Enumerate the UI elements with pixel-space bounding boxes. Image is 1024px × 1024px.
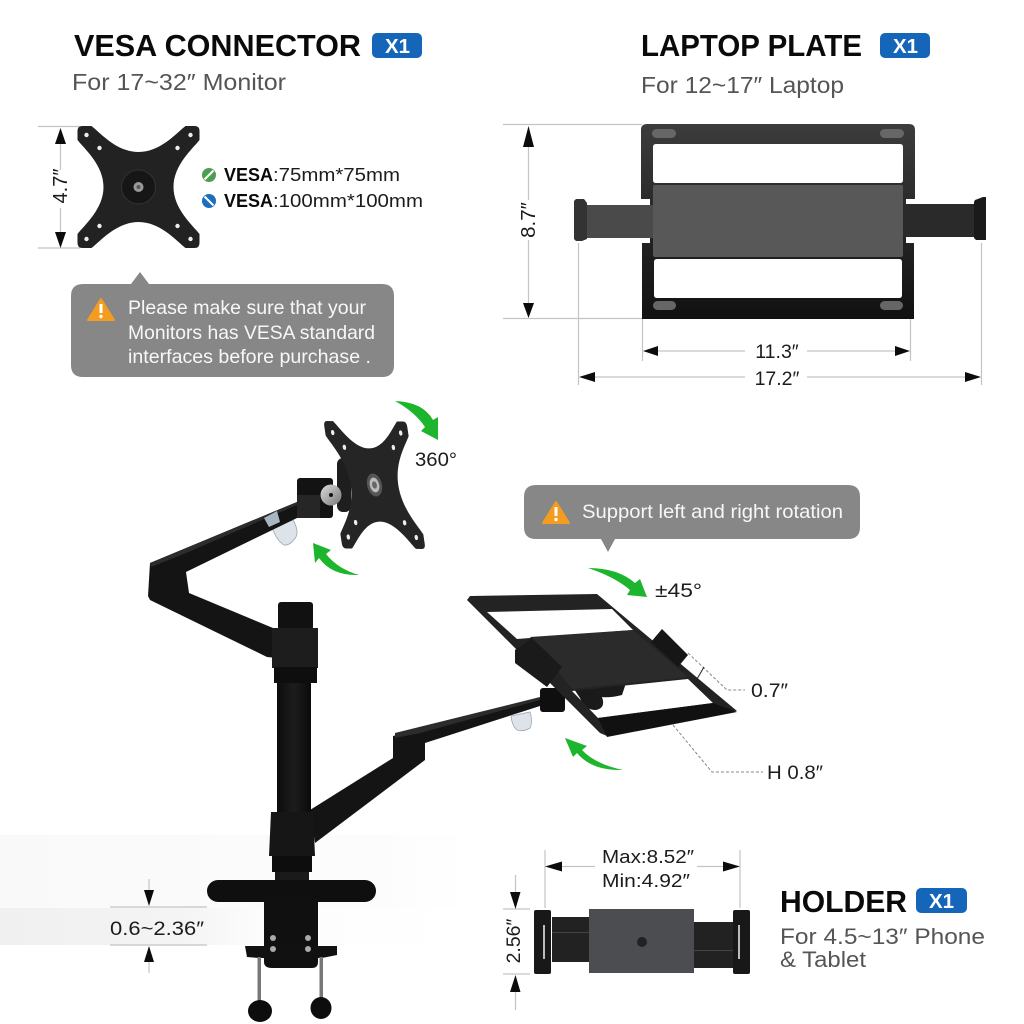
legend text: 100mm: VESA bbox=[224, 190, 273, 211]
monitor arm product bbox=[148, 421, 540, 1022]
laptop arm highlight bbox=[395, 697, 540, 738]
holder grips bbox=[534, 910, 750, 974]
icon: VESA plate bbox=[78, 126, 200, 248]
arm highlight bbox=[150, 502, 297, 567]
callout text: Please make sure that your bbox=[128, 297, 367, 319]
badge: X1 bbox=[880, 33, 930, 58]
laptop plate diagram bbox=[503, 124, 986, 390]
dimension: width: Max:8.52″ bbox=[602, 847, 695, 867]
legend text: 100mm: :100mm*100mm bbox=[273, 190, 423, 211]
tray hub bbox=[540, 680, 627, 712]
tray centre panel bbox=[530, 630, 688, 689]
dimension: 0.7 inch bbox=[688, 653, 788, 702]
holder dimensions bbox=[503, 847, 740, 1010]
heading: laptop plate: LAPTOP PLATE bbox=[641, 28, 862, 63]
badge: X1: X1 bbox=[929, 891, 954, 913]
legend text: 100mm bbox=[224, 190, 423, 211]
left arm and grip bbox=[574, 199, 654, 241]
dimension: desk thickness bbox=[110, 879, 207, 973]
dimension: 8.7 inch: 8.7″ bbox=[517, 202, 540, 238]
subtitle: monitor size: For 17~32″ Monitor bbox=[72, 69, 286, 95]
dimension: 17.2 inch: 17.2″ bbox=[755, 368, 800, 390]
centre panel bbox=[653, 185, 903, 257]
badge: X1: X1 bbox=[385, 36, 410, 58]
left grip bbox=[515, 638, 562, 687]
legend text: 75mm: VESA bbox=[224, 164, 273, 185]
legend text: 75mm: :75mm*75mm bbox=[273, 164, 400, 185]
badge: X1 bbox=[372, 33, 422, 58]
dimension: width: Min:4.92″ bbox=[602, 871, 691, 891]
label: 360 degrees: 360° bbox=[415, 449, 457, 471]
clip band bbox=[264, 511, 280, 527]
callout text: Support left and right rotation bbox=[582, 501, 843, 523]
clamp bracket bbox=[245, 898, 337, 1022]
plate body bbox=[641, 124, 915, 319]
dimension: width bbox=[602, 847, 695, 891]
icon: blue screw bbox=[202, 194, 216, 208]
heading: holder bbox=[780, 884, 985, 972]
icon: green screw bbox=[202, 168, 216, 182]
legend: VESA sizes bbox=[202, 164, 423, 211]
callout: VESA warning bbox=[71, 272, 394, 377]
icon: warning triangle bbox=[543, 502, 569, 523]
tray front lip bbox=[598, 703, 737, 737]
legend text: 75mm bbox=[224, 164, 400, 185]
subtitle: holder size: & Tablet bbox=[780, 947, 867, 972]
dimension lines bbox=[503, 124, 982, 390]
VESA plate diagram with height dimension bbox=[38, 126, 200, 248]
upper arm and elbow bbox=[148, 502, 318, 662]
laptop tray on arm bbox=[467, 594, 737, 737]
dimension: H 0.8 inch bbox=[673, 725, 823, 784]
dimension: height: 2.56″ bbox=[503, 918, 525, 963]
subtitle: holder size bbox=[780, 924, 985, 972]
icon: warning triangle bbox=[88, 299, 114, 320]
subtitle: laptop size: For 12~17″ Laptop bbox=[641, 72, 844, 98]
second lower arm bbox=[310, 698, 540, 843]
dimension: H 0.8 inch: H 0.8″ bbox=[767, 762, 823, 784]
right arm and grip bbox=[903, 197, 986, 240]
heading: laptop plate bbox=[641, 28, 930, 98]
dimension: 4.7 inch: 4.7″ bbox=[50, 169, 72, 203]
dimension: 0.7 inch: 0.7″ bbox=[751, 680, 788, 702]
callout: rotation note bbox=[524, 485, 860, 552]
rotation arrow: laptop bottom bbox=[565, 738, 623, 770]
heading: holder: HOLDER bbox=[780, 884, 907, 919]
dimension: desk thickness: 0.6~2.36″ bbox=[110, 918, 204, 940]
callout text: interfaces before purchase . bbox=[128, 346, 371, 368]
callout text: Monitors has VESA standard bbox=[128, 322, 375, 344]
badge: X1: X1 bbox=[893, 36, 918, 58]
rotation arrow: laptop top bbox=[588, 568, 647, 597]
holder arms bbox=[552, 917, 733, 968]
holder centre bbox=[589, 909, 694, 973]
heading: VESA connector: VESA CONNECTOR bbox=[74, 28, 361, 63]
heading: VESA connector bbox=[72, 28, 422, 95]
desk surface background bbox=[0, 835, 470, 945]
rubber pads bbox=[652, 129, 904, 310]
VESA plate on arm bbox=[324, 421, 425, 549]
badge: X1 bbox=[916, 888, 967, 913]
dimension: 11.3 inch: 11.3″ bbox=[755, 341, 799, 363]
clear clip on laptop arm bbox=[511, 712, 532, 731]
rotation arrow: 360 bottom bbox=[313, 543, 359, 575]
right grip bbox=[651, 629, 688, 667]
label: plus minus 45 degrees: ±45° bbox=[655, 580, 702, 602]
swivel head bbox=[297, 458, 351, 518]
dimension: 4.7 inch bbox=[38, 126, 80, 248]
clamp base bbox=[207, 880, 376, 902]
cable clip bbox=[272, 520, 297, 545]
subtitle: holder size: For 4.5~13″ Phone bbox=[780, 924, 985, 949]
tray frame bbox=[467, 594, 737, 736]
callout text bbox=[128, 297, 375, 368]
pole bbox=[269, 602, 318, 886]
rotation arrow: 360 top bbox=[395, 401, 438, 440]
holder diagram bbox=[503, 847, 750, 1010]
